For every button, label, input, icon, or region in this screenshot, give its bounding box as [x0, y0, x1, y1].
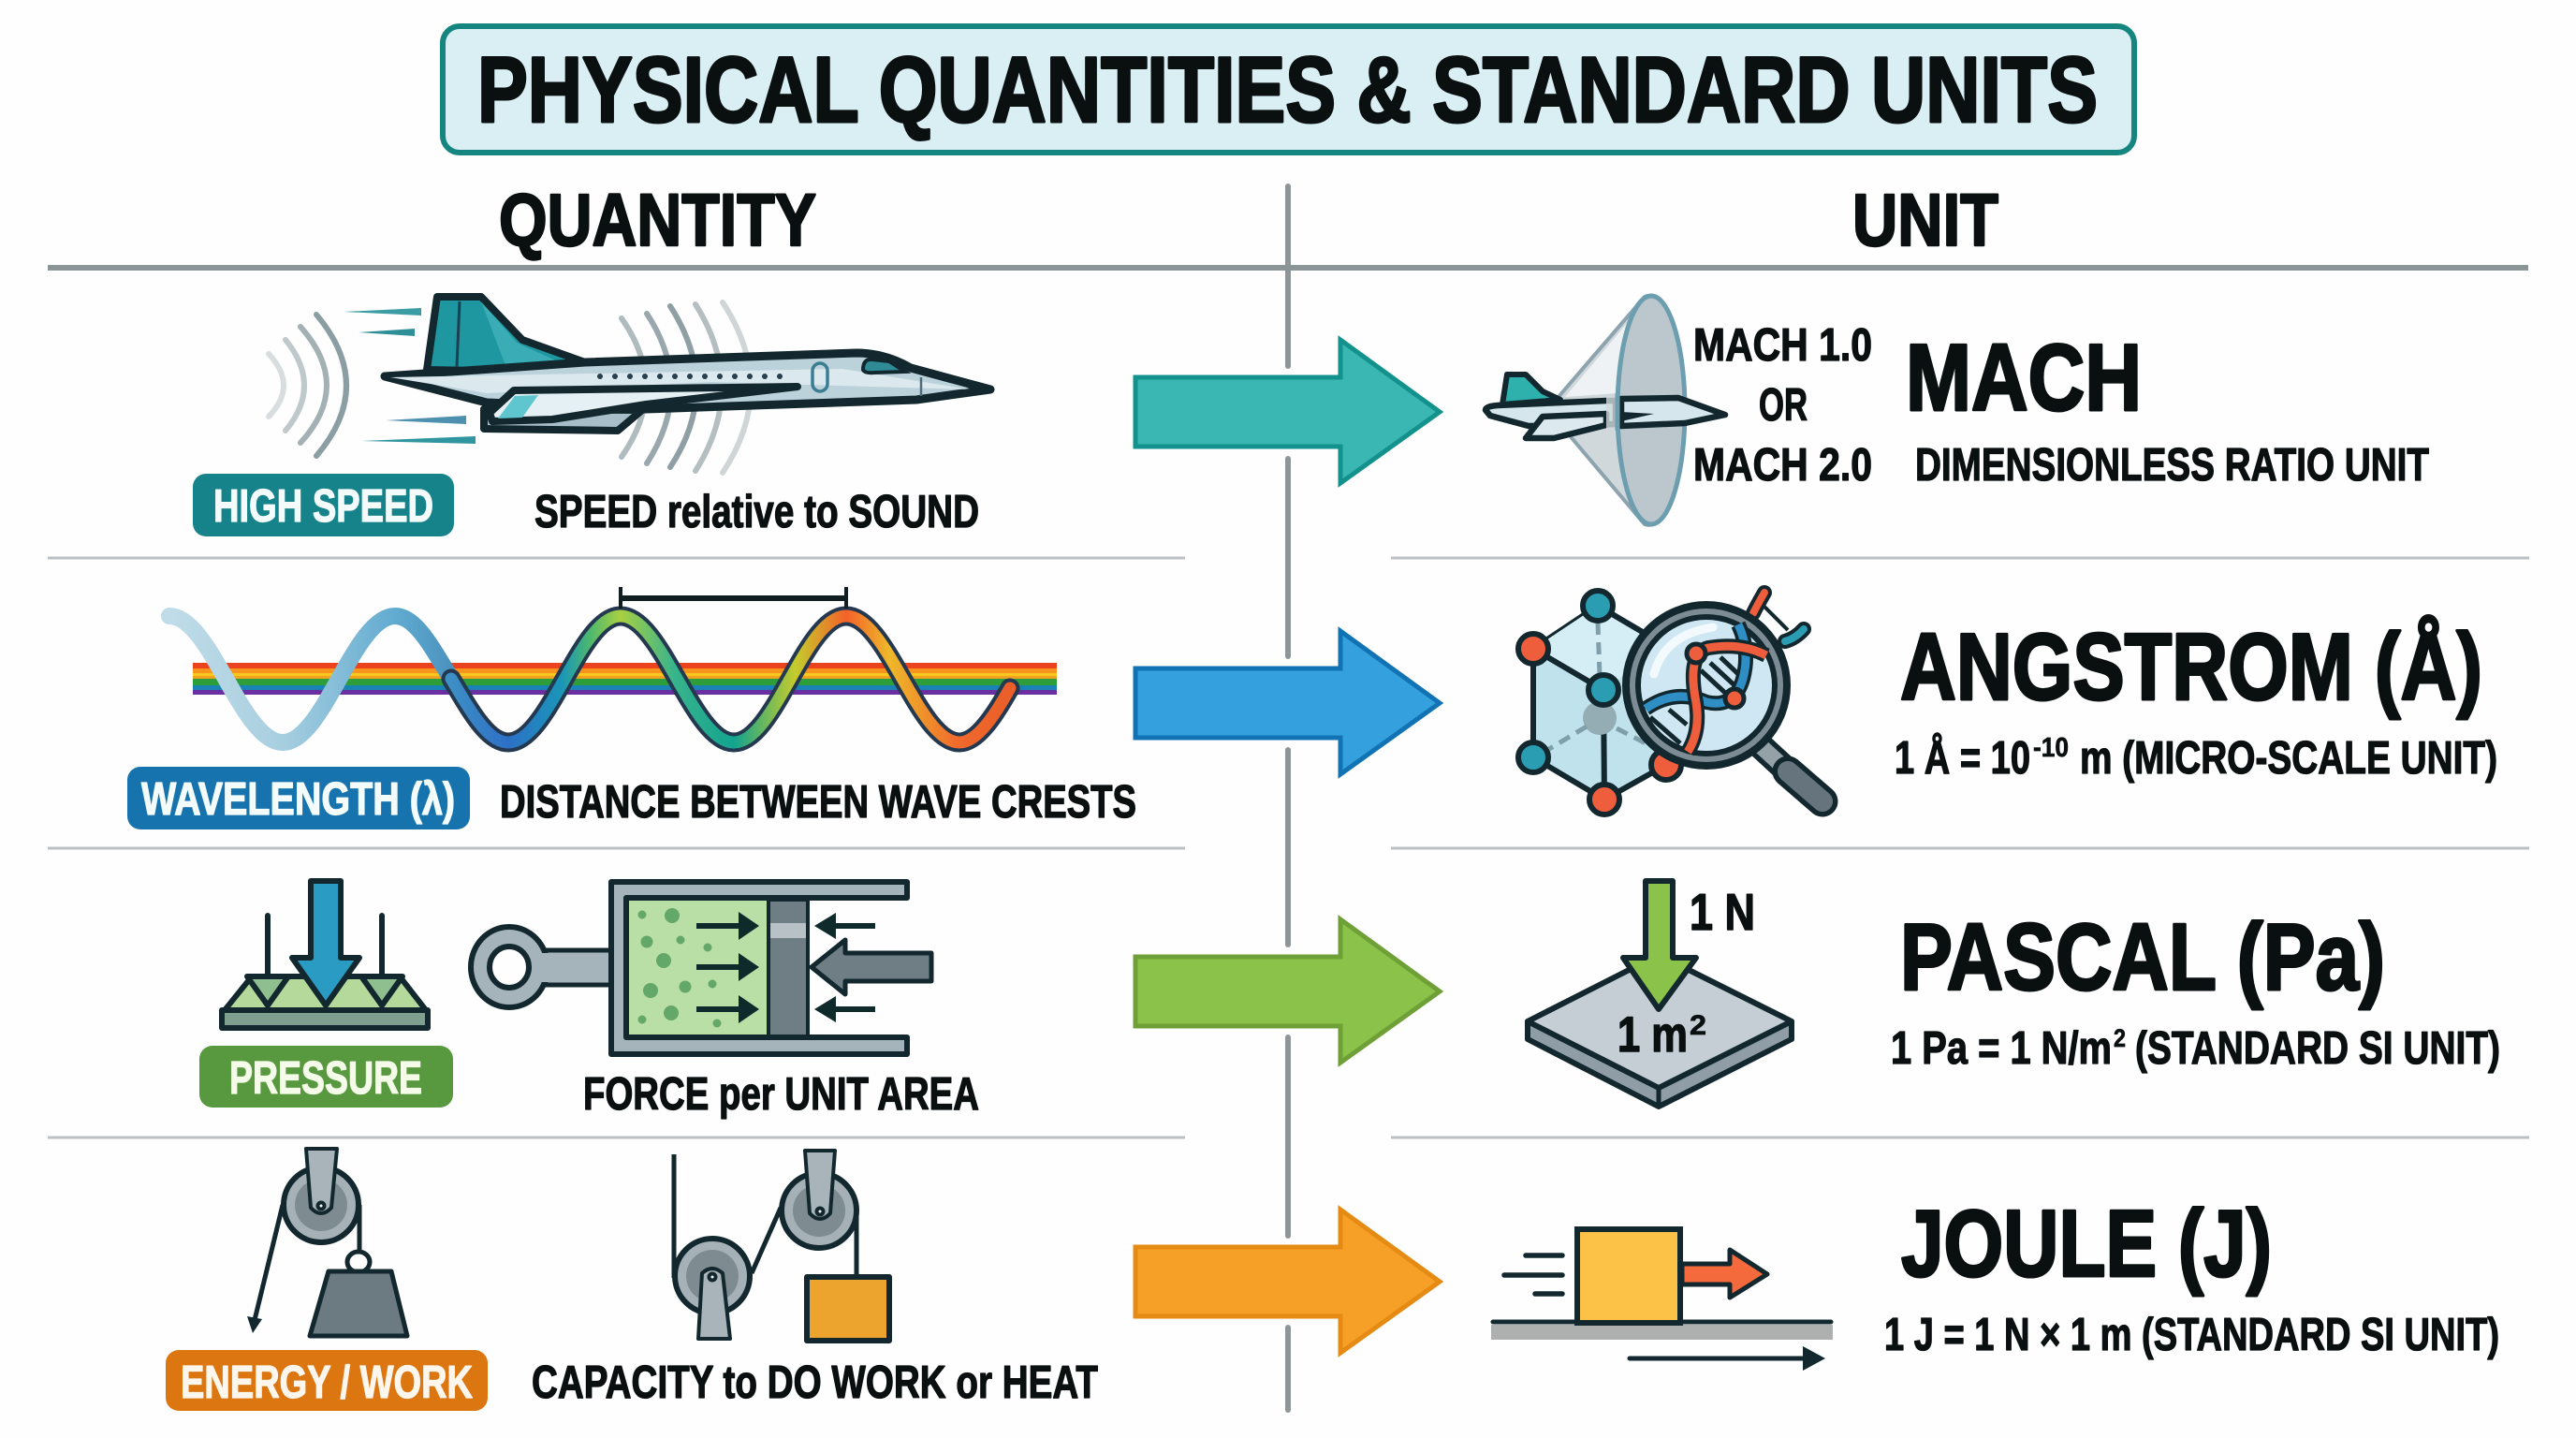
arrow: energy to joule	[1135, 1210, 1440, 1353]
badge: high speed	[193, 474, 454, 536]
panel: mach unit	[1486, 296, 2429, 525]
unit name: joule: JOULE (J)	[1901, 1192, 2272, 1297]
icon: crystal lattice and DNA under magnifier	[1518, 591, 1822, 814]
unit definition: pascal	[1891, 1023, 2500, 1074]
badge: wavelength	[127, 767, 470, 829]
unit definition: dimensionless: DIMENSIONLESS RATIO UNIT	[1915, 440, 2429, 491]
unit definition: pascal: 1 Pa = 1 N/m	[1891, 1023, 2112, 1074]
icon: piston compressing gas	[471, 882, 931, 1054]
unit name: pascal: PASCAL (Pa)	[1900, 905, 2385, 1010]
arrow: pressure to pascal	[1135, 919, 1440, 1063]
badge: pressure	[199, 1046, 453, 1108]
arrow: wavelength to angstrom	[1135, 631, 1440, 774]
badge: energy / work	[166, 1350, 488, 1411]
unit definition: angstrom: -10	[2033, 733, 2069, 763]
panel: pressure quantity	[199, 881, 979, 1120]
mach examples text	[1693, 320, 1872, 491]
unit definition: pascal: 2	[2114, 1024, 2126, 1052]
description: force per unit area: FORCE per UNIT AREA	[583, 1069, 979, 1120]
icon: one newton on one square metre: 2	[1690, 1010, 1706, 1041]
badge: high speed: HIGH SPEED	[213, 481, 433, 532]
panel: wavelength quantity	[127, 587, 1136, 829]
icon: supersonic jet with sound waves	[269, 297, 990, 473]
panel: pascal unit	[1528, 881, 2500, 1107]
panel: joule unit	[1491, 1192, 2499, 1371]
column heading: quantity: QUANTITY	[499, 178, 816, 261]
title banner	[443, 26, 2134, 153]
description: distance between wave crests: DISTANCE BETWEEN WAVE CRESTS	[500, 777, 1136, 828]
badge: wavelength: WAVELENGTH (λ)	[141, 774, 455, 825]
arrow: speed to mach	[1135, 340, 1440, 483]
description: speed relative to sound: SPEED relative to SOUND	[534, 487, 979, 537]
title banner: PHYSICAL QUANTITIES & STANDARD UNITS	[477, 37, 2098, 141]
column heading: unit: UNIT	[1852, 178, 1998, 261]
icon: jet crossing mach cone	[1486, 296, 1725, 525]
badge: energy / work: ENERGY / WORK	[181, 1357, 473, 1408]
unit name: mach: MACH	[1906, 326, 2142, 431]
mach examples text: MACH 2.0	[1693, 440, 1872, 491]
icon: force moving block over distance	[1491, 1229, 1833, 1371]
panel: energy quantity	[166, 1149, 1098, 1411]
mach examples text: OR	[1759, 380, 1808, 431]
icon: pulley lifting weight	[247, 1149, 407, 1336]
icon: double pulley with load	[674, 1151, 889, 1341]
icon: one newton on one square metre: 1 m	[1617, 1007, 1688, 1063]
badge: pressure: PRESSURE	[229, 1053, 422, 1104]
description: capacity to do work or heat: CAPACITY to DO WORK or HEAT	[532, 1357, 1098, 1408]
unit definition: angstrom	[1895, 733, 2497, 784]
mach examples text: MACH 1.0	[1693, 320, 1872, 371]
panel: angstrom unit	[1518, 591, 2497, 814]
icon: rainbow band with sine wave	[169, 587, 1057, 742]
icon: pressure on a surface	[222, 881, 428, 1028]
icon: one newton on one square metre	[1528, 881, 1792, 1107]
icon: one newton on one square metre: 1 N	[1690, 883, 1755, 941]
unit definition: angstrom: 1 Å = 10	[1895, 733, 2030, 784]
panel: speed quantity	[193, 297, 990, 537]
